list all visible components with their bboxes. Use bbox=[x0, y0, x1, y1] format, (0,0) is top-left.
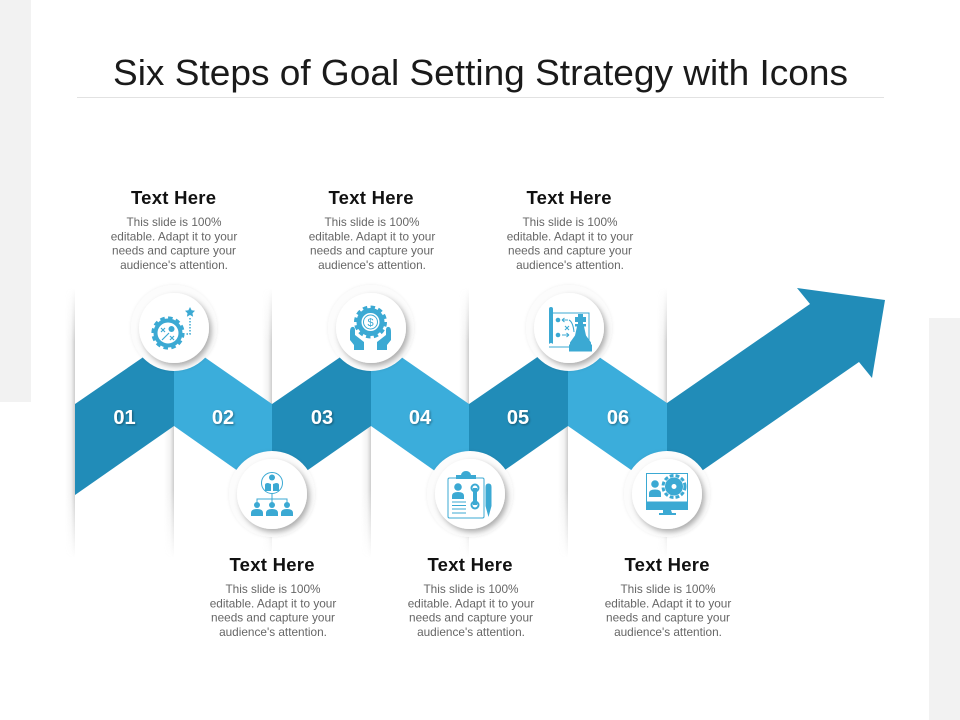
text block 6: This slide is 100% bbox=[620, 582, 716, 596]
text block 1: This slide is 100% bbox=[126, 215, 222, 229]
text block 2 bbox=[210, 554, 336, 639]
text block 2: Text Here bbox=[230, 554, 314, 575]
text block 2: editable. Adapt it to your bbox=[210, 596, 336, 610]
text block 4: Text Here bbox=[428, 554, 512, 575]
badge 2: hierarchy icon bbox=[229, 451, 315, 537]
text block 4: needs and capture your bbox=[409, 610, 533, 624]
text block 5: This slide is 100% bbox=[522, 215, 618, 229]
text block 6: Text Here bbox=[624, 554, 710, 575]
segment 04 bbox=[371, 336, 469, 495]
text block 2: audience's attention. bbox=[219, 625, 327, 639]
text block 3 bbox=[309, 187, 435, 272]
text block 6: editable. Adapt it to your bbox=[605, 596, 731, 610]
background block: right bbox=[929, 318, 960, 720]
number 02: 02 bbox=[212, 407, 234, 429]
number 06: 06 bbox=[607, 407, 629, 429]
badge 3: money gear in hands icon bbox=[328, 285, 414, 371]
badge 3: money gear in hands icon: $ bbox=[367, 317, 374, 329]
text block 1 bbox=[111, 187, 237, 272]
segment 05 bbox=[469, 336, 568, 495]
text block 3: needs and capture your bbox=[310, 244, 434, 258]
segment 06 bbox=[568, 336, 667, 495]
text block 6: needs and capture your bbox=[606, 610, 730, 624]
text block 4: audience's attention. bbox=[417, 625, 525, 639]
text block 6: audience's attention. bbox=[614, 625, 722, 639]
text block 3: This slide is 100% bbox=[324, 215, 420, 229]
text block 5: Text Here bbox=[526, 187, 612, 208]
text block 3: audience's attention. bbox=[318, 258, 426, 272]
badge 1: goal gear and star icon bbox=[131, 285, 217, 371]
text block 5: needs and capture your bbox=[508, 244, 632, 258]
number 05: 05 bbox=[507, 407, 529, 429]
text block 5 bbox=[507, 187, 633, 272]
text block 2: This slide is 100% bbox=[225, 582, 321, 596]
segment 01 bbox=[75, 336, 174, 495]
title: Six Steps of Goal Setting Strategy with Icons bbox=[113, 52, 848, 93]
text block 6 bbox=[605, 554, 731, 639]
text block 1: audience's attention. bbox=[120, 258, 228, 272]
arrow bbox=[667, 288, 885, 495]
badge 6: monitor with person and gear icon bbox=[624, 451, 710, 537]
text block 1: editable. Adapt it to your bbox=[111, 230, 237, 244]
badge 5: strategy map and chess king icon bbox=[526, 285, 612, 371]
segment 03 bbox=[272, 336, 371, 495]
text block 1: needs and capture your bbox=[112, 244, 236, 258]
number 04: 04 bbox=[409, 407, 432, 429]
text block 4: editable. Adapt it to your bbox=[408, 596, 534, 610]
text block 4: This slide is 100% bbox=[423, 582, 519, 596]
text block 1: Text Here bbox=[131, 187, 216, 208]
number 01: 01 bbox=[113, 407, 136, 429]
text block 4 bbox=[408, 554, 534, 639]
number 03: 03 bbox=[311, 407, 333, 429]
zigzag band with arrow bbox=[75, 288, 885, 495]
text block 3: Text Here bbox=[328, 187, 414, 208]
background block: left bbox=[0, 0, 31, 402]
text block 3: editable. Adapt it to your bbox=[309, 230, 435, 244]
text block 5: editable. Adapt it to your bbox=[507, 230, 633, 244]
badge 4: clipboard and tools icon bbox=[427, 451, 513, 537]
text block 2: needs and capture your bbox=[211, 610, 335, 624]
segment 02 bbox=[174, 336, 272, 495]
text block 5: audience's attention. bbox=[516, 258, 624, 272]
